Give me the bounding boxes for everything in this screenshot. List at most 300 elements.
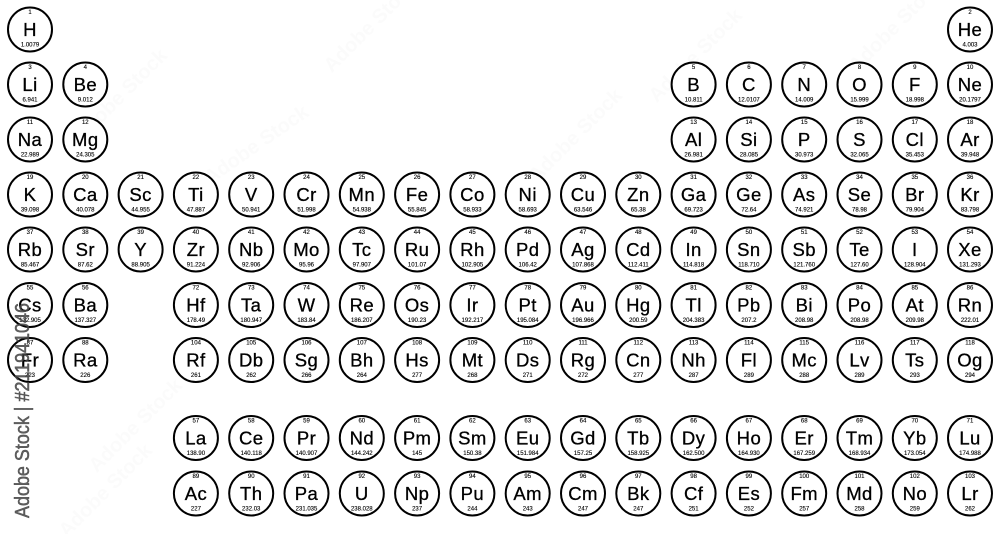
element: Tc: Tc bbox=[352, 239, 371, 260]
element: Tl: 204.383 bbox=[683, 318, 705, 324]
element: Mc: 288 bbox=[799, 373, 810, 379]
element: At: 209.98 bbox=[906, 318, 925, 324]
element: Fm bbox=[782, 472, 826, 516]
element: Tb bbox=[616, 416, 660, 460]
element: Eu: Eu bbox=[516, 428, 539, 448]
element: In: 114.818 bbox=[683, 262, 705, 268]
element: Y: Y bbox=[134, 239, 147, 260]
element: Hg bbox=[616, 283, 660, 327]
element: Lr bbox=[948, 472, 992, 516]
element: Md: 258 bbox=[854, 506, 865, 512]
element: Zr: Zr bbox=[187, 239, 205, 260]
element: Te bbox=[838, 228, 882, 272]
element: Mg: 12 bbox=[82, 120, 89, 126]
element: Xe: 131.293 bbox=[959, 262, 982, 268]
element: U: 92 bbox=[358, 474, 366, 480]
element: Cf: Cf bbox=[684, 483, 704, 504]
element: Zn: Zn bbox=[627, 184, 649, 205]
element: Cn: 112 bbox=[634, 340, 644, 346]
element: Sr: 87.62 bbox=[78, 262, 93, 268]
element: Pr: 59 bbox=[303, 418, 310, 424]
element: Fr: 87 bbox=[27, 340, 34, 346]
element: Si bbox=[727, 118, 771, 162]
element: Tl: Tl bbox=[685, 294, 702, 316]
element: Po: Po bbox=[848, 294, 871, 316]
element: Au: Au bbox=[571, 294, 595, 316]
element: H bbox=[8, 8, 52, 52]
element: Bk bbox=[616, 472, 660, 516]
element: O: 15.999 bbox=[850, 98, 869, 104]
element: Bi bbox=[782, 283, 826, 327]
element: Ds: 110 bbox=[523, 340, 533, 346]
element: Ho bbox=[727, 416, 771, 460]
element: Am: 243 bbox=[523, 506, 533, 512]
element: Rn: Rn bbox=[958, 294, 982, 316]
element: Mo bbox=[284, 228, 328, 272]
element: Tm: Tm bbox=[846, 428, 873, 448]
element: Te: Te bbox=[849, 239, 870, 260]
element: Cs: Cs bbox=[18, 294, 42, 316]
element: Hs: 277 bbox=[412, 373, 423, 379]
element: Pt bbox=[506, 283, 550, 327]
element: Cn: Cn bbox=[626, 350, 651, 370]
element: At bbox=[893, 283, 937, 327]
element: Db: 262 bbox=[246, 373, 257, 379]
element: C: 12.0107 bbox=[738, 98, 760, 104]
element: Ar: Ar bbox=[960, 129, 980, 150]
element: K bbox=[8, 172, 52, 216]
element: U: U bbox=[355, 483, 369, 504]
element: Ta bbox=[229, 283, 273, 327]
element: Ti: 22 bbox=[193, 175, 200, 181]
element: Cf: 251 bbox=[689, 506, 699, 512]
element: Li: Li bbox=[22, 74, 38, 95]
element: Cd bbox=[616, 228, 660, 272]
element: La: 57 bbox=[193, 418, 200, 424]
element: Kr bbox=[948, 172, 992, 216]
element: B bbox=[672, 62, 716, 106]
element: Br: 35 bbox=[911, 175, 919, 181]
element: P: P bbox=[798, 129, 811, 150]
element: Tc: 97.907 bbox=[353, 262, 372, 268]
element: Gd bbox=[561, 416, 605, 460]
element: Se: 78.98 bbox=[852, 208, 868, 214]
element: Pt: 78 bbox=[524, 286, 532, 292]
element: Cs: 132.905 bbox=[19, 318, 42, 324]
element: Mg bbox=[63, 118, 107, 162]
element: Cu: 63.546 bbox=[574, 208, 593, 214]
element: Eu: 151.984 bbox=[517, 451, 539, 457]
element: In: 49 bbox=[690, 230, 698, 236]
element: Ts bbox=[893, 338, 937, 382]
element: Mn: 54.938 bbox=[353, 208, 372, 214]
element: I bbox=[893, 228, 937, 272]
element: Hg: Hg bbox=[626, 294, 651, 316]
element: Hg: 80 bbox=[635, 286, 642, 292]
element: K: 39.098 bbox=[21, 208, 40, 214]
element: Mg: Mg bbox=[72, 129, 99, 150]
element: Ne: Ne bbox=[958, 74, 982, 95]
element: Rf: Rf bbox=[186, 350, 206, 370]
element: Cr: 24 bbox=[303, 175, 310, 181]
element: Ho: 67 bbox=[746, 418, 753, 424]
element: Mn: 25 bbox=[358, 175, 366, 181]
element: Sb: Sb bbox=[792, 239, 816, 260]
element: As: 74.921 bbox=[795, 208, 814, 214]
element: Cu: 29 bbox=[580, 175, 587, 181]
element: Rn: 86 bbox=[967, 286, 974, 292]
element: Ar bbox=[948, 118, 992, 162]
element: Es bbox=[727, 472, 771, 516]
vertical stock watermark: Adobe Stock | #211941046 bbox=[12, 303, 34, 518]
element: Sg: 106 bbox=[301, 340, 312, 346]
element: Pu bbox=[450, 472, 494, 516]
element: Pa: 231.035 bbox=[296, 506, 318, 512]
element: Cd: 112.411 bbox=[628, 262, 649, 268]
element: Zr: 40 bbox=[193, 230, 200, 236]
element: Ir bbox=[450, 283, 494, 327]
element: Db: 105 bbox=[246, 340, 257, 346]
faint diagonal background watermarks: Adobe Stock bbox=[85, 374, 187, 477]
element: Rf: 261 bbox=[191, 373, 202, 379]
element: W: 74 bbox=[303, 286, 310, 292]
element: Pb: 82 bbox=[746, 286, 753, 292]
element: Th: 90 bbox=[248, 474, 255, 480]
element: Ru: 44 bbox=[414, 230, 421, 236]
element: Pm bbox=[395, 416, 439, 460]
element: He: 2 bbox=[968, 10, 972, 16]
element: Th bbox=[229, 472, 273, 516]
element: Pu: 94 bbox=[469, 474, 476, 480]
element: Ac: 227 bbox=[191, 506, 202, 512]
element: Es: Es bbox=[738, 483, 760, 504]
faint diagonal background watermarks: Adobe Stock bbox=[645, 4, 747, 107]
element: He: He bbox=[958, 19, 982, 40]
element: Ce bbox=[229, 416, 273, 460]
element: Er: Er bbox=[795, 428, 814, 448]
element: Al: Al bbox=[685, 129, 702, 150]
element: Nb: 92.906 bbox=[242, 262, 261, 268]
element: Nb: 41 bbox=[248, 230, 255, 236]
element: Md: 101 bbox=[854, 474, 865, 480]
element: Db bbox=[229, 338, 273, 382]
element: Cm: 247 bbox=[578, 506, 589, 512]
element: Ra bbox=[63, 338, 107, 382]
element: Pm: 145 bbox=[412, 451, 423, 457]
element: Pt: 195.084 bbox=[517, 318, 539, 324]
element: Ru bbox=[395, 228, 439, 272]
element: Hf: 72 bbox=[193, 286, 200, 292]
element: Au: 79 bbox=[580, 286, 587, 292]
element: Am bbox=[506, 472, 550, 516]
element: Th: Th bbox=[240, 483, 262, 504]
element: Fl: Fl bbox=[741, 350, 757, 370]
element: Ce: Ce bbox=[239, 428, 263, 448]
element: C: 6 bbox=[747, 65, 751, 71]
element: Np: 237 bbox=[412, 506, 423, 512]
element: Ac bbox=[174, 472, 218, 516]
element: Si: Si bbox=[740, 129, 758, 150]
element: Xe: Xe bbox=[958, 239, 982, 260]
element: Sc: 44.955 bbox=[131, 208, 150, 214]
element: Ti: Ti bbox=[188, 184, 204, 205]
element: Cl: 35.453 bbox=[906, 152, 925, 158]
element: Pb bbox=[727, 283, 771, 327]
element: No: 259 bbox=[910, 506, 920, 512]
element: Hf: 178.49 bbox=[187, 318, 206, 324]
element: I: I bbox=[912, 239, 918, 260]
element: Re: Re bbox=[350, 294, 374, 316]
element: Pr bbox=[284, 416, 328, 460]
element: I: 53 bbox=[911, 230, 919, 236]
element: Br: Br bbox=[905, 184, 924, 205]
element: Sn: Sn bbox=[737, 239, 761, 260]
element: Cl bbox=[893, 118, 937, 162]
element: Ta: 73 bbox=[248, 286, 255, 292]
element: As: As bbox=[793, 184, 815, 205]
element: At: 85 bbox=[911, 286, 919, 292]
element: Mt: Mt bbox=[462, 350, 483, 370]
element: Bi: 83 bbox=[801, 286, 808, 292]
element: Cm: Cm bbox=[568, 483, 598, 504]
element: Og: Og bbox=[957, 350, 983, 370]
element: N bbox=[782, 62, 826, 106]
element: Nd: 144.242 bbox=[351, 451, 373, 457]
element: Xe bbox=[948, 228, 992, 272]
element: S: 32.065 bbox=[850, 152, 869, 158]
element: Es: 99 bbox=[746, 474, 753, 480]
element: H: 1.0079 bbox=[21, 42, 40, 48]
element: Ts: 117 bbox=[910, 340, 920, 346]
element: Pu: 244 bbox=[467, 506, 478, 512]
element: Lv: 116 bbox=[855, 340, 865, 346]
element: Ba: 56 bbox=[82, 286, 89, 292]
element: Sg bbox=[284, 338, 328, 382]
element: Bh bbox=[340, 338, 384, 382]
element: Si: 28.085 bbox=[740, 152, 759, 158]
element: Bh: 107 bbox=[357, 340, 367, 346]
element: Dy bbox=[672, 416, 716, 460]
element: K: K bbox=[24, 184, 37, 205]
element: Cl: Cl bbox=[906, 129, 924, 150]
element: P bbox=[782, 118, 826, 162]
element: Kr: 83.798 bbox=[961, 208, 980, 214]
element: V: 23 bbox=[248, 175, 255, 181]
element: Og bbox=[948, 338, 992, 382]
element: Cm bbox=[561, 472, 605, 516]
element: O: 8 bbox=[858, 65, 862, 71]
element: Ac: 89 bbox=[193, 474, 200, 480]
element: Bk: Bk bbox=[627, 483, 650, 504]
element: Yb bbox=[893, 416, 937, 460]
element: B: 10.811 bbox=[685, 98, 703, 104]
element: Dy: 66 bbox=[690, 418, 698, 424]
element: Sc bbox=[119, 172, 163, 216]
element: Sb: 51 bbox=[801, 230, 808, 236]
element: Tm: 168.934 bbox=[849, 451, 871, 457]
element: Ag: 47 bbox=[580, 230, 587, 236]
element: Ni bbox=[506, 172, 550, 216]
element: Yb: Yb bbox=[903, 428, 927, 448]
element: Au: 196.966 bbox=[572, 318, 594, 324]
element: F bbox=[893, 62, 937, 106]
element: Ds: Ds bbox=[516, 350, 539, 370]
element: Rg bbox=[561, 338, 605, 382]
element: Cu bbox=[561, 172, 605, 216]
element: No: No bbox=[903, 483, 927, 504]
element: Pd: Pd bbox=[516, 239, 539, 260]
element: Li bbox=[8, 62, 52, 106]
element: No bbox=[893, 472, 937, 516]
element: Co bbox=[450, 172, 494, 216]
element: Sn bbox=[727, 228, 771, 272]
element: Ir: Ir bbox=[466, 294, 478, 316]
element: Ce: 140.118 bbox=[241, 451, 262, 457]
element: Se: Se bbox=[848, 184, 871, 205]
element: Fm: Fm bbox=[790, 483, 818, 504]
element: Ir: 192.217 bbox=[462, 318, 484, 324]
element: Po: 208.98 bbox=[850, 318, 869, 324]
element: Cr: 51.998 bbox=[297, 208, 316, 214]
element: Er: 167.259 bbox=[793, 451, 816, 457]
element: Ra: Ra bbox=[73, 350, 98, 370]
element: F: 9 bbox=[913, 65, 917, 71]
element: N: N bbox=[797, 74, 811, 95]
element: Ru: 101.07 bbox=[408, 262, 427, 268]
element: Cs: 55 bbox=[27, 286, 34, 292]
element: Sm: Sm bbox=[458, 428, 487, 448]
element: Ni: 58.693 bbox=[519, 208, 538, 214]
element: Er: 68 bbox=[801, 418, 808, 424]
element: Ra: 88 bbox=[82, 340, 89, 346]
element: Ca: 40.078 bbox=[76, 208, 95, 214]
element: S bbox=[838, 118, 882, 162]
element: Zn bbox=[616, 172, 660, 216]
element: La: 138.90 bbox=[187, 451, 206, 457]
element: Ne: 10 bbox=[967, 65, 974, 71]
element: Kr: Kr bbox=[960, 184, 980, 205]
element: Co: 27 bbox=[469, 175, 476, 181]
element: Lr: Lr bbox=[961, 483, 979, 504]
element: Np: 93 bbox=[414, 474, 421, 480]
element: Nh: Nh bbox=[681, 350, 706, 370]
element: Ga: Ga bbox=[681, 184, 707, 205]
faint diagonal background watermarks: Adobe Stock bbox=[525, 84, 627, 187]
element: Tb: 65 bbox=[635, 418, 642, 424]
element: S: S bbox=[853, 129, 866, 150]
element: Cd: 48 bbox=[635, 230, 642, 236]
element: Y: 39 bbox=[137, 230, 145, 236]
element: Ts: Ts bbox=[905, 350, 924, 370]
element: Na: 11 bbox=[27, 120, 34, 126]
element: Ar: 18 bbox=[967, 120, 974, 126]
element: Sc: Sc bbox=[129, 184, 152, 205]
element: Ba: 137.327 bbox=[74, 318, 97, 324]
element: Fl: 289 bbox=[744, 373, 755, 379]
element: I: 128.904 bbox=[904, 262, 926, 268]
element: Fe bbox=[395, 172, 439, 216]
element: Zr bbox=[174, 228, 218, 272]
element: Fe: 55.845 bbox=[408, 208, 427, 214]
element: In bbox=[672, 228, 716, 272]
element: Cr: Cr bbox=[296, 184, 317, 205]
element: Md: Md bbox=[846, 483, 873, 504]
element: Ge: 72.64 bbox=[741, 208, 757, 214]
element: Se: 34 bbox=[856, 175, 863, 181]
element: Kr: 36 bbox=[967, 175, 974, 181]
element: Rg: 272 bbox=[578, 373, 589, 379]
element: At: At bbox=[906, 294, 924, 316]
element: W bbox=[284, 283, 328, 327]
element: Li: 6.941 bbox=[22, 98, 38, 104]
element: No: 102 bbox=[910, 474, 920, 480]
element: Si: 14 bbox=[746, 120, 753, 126]
element: Ti: 47.887 bbox=[187, 208, 206, 214]
element: Mg: 24.305 bbox=[76, 152, 95, 158]
element: Fr: Fr bbox=[21, 350, 39, 370]
element: Cl: 17 bbox=[911, 120, 919, 126]
element: Ni: Ni bbox=[519, 184, 537, 205]
element: Ga: 31 bbox=[690, 175, 698, 181]
element: Tb: 158.925 bbox=[627, 451, 650, 457]
element: Au bbox=[561, 283, 605, 327]
element: Ca bbox=[63, 172, 107, 216]
element: Bk: 97 bbox=[635, 474, 642, 480]
element: Sc: 21 bbox=[137, 175, 145, 181]
element: V bbox=[229, 172, 273, 216]
element: Ba: Ba bbox=[74, 294, 97, 316]
element: B: B bbox=[687, 74, 700, 95]
element: Ds: 271 bbox=[523, 373, 533, 379]
element: F: F bbox=[909, 74, 921, 95]
element: Md bbox=[838, 472, 882, 516]
element: Yb: 173.054 bbox=[904, 451, 926, 457]
element: W: W bbox=[298, 294, 316, 316]
element: Te: 127.60 bbox=[850, 262, 869, 268]
element: Dy: Dy bbox=[682, 428, 706, 448]
element: Pa bbox=[284, 472, 328, 516]
element: V: V bbox=[245, 184, 258, 205]
element: Ne bbox=[948, 62, 992, 106]
element: Lu: 174.988 bbox=[959, 451, 982, 457]
element: Ge: Ge bbox=[736, 184, 762, 205]
element: Tc bbox=[340, 228, 384, 272]
element: Cf: 98 bbox=[690, 474, 698, 480]
element: Rg: Rg bbox=[571, 350, 595, 370]
element: Gd: 64 bbox=[580, 418, 587, 424]
element: Ba bbox=[63, 283, 107, 327]
element: Rb: 37 bbox=[27, 230, 34, 236]
element: Re: 186.207 bbox=[351, 318, 373, 324]
element: Sm: 150.38 bbox=[463, 451, 482, 457]
element: Pt: Pt bbox=[519, 294, 537, 316]
element: Sb bbox=[782, 228, 826, 272]
element: Rf: 104 bbox=[191, 340, 202, 346]
element: Og: 118 bbox=[965, 340, 975, 346]
element: Bk: 247 bbox=[633, 506, 644, 512]
element: Mo: 42 bbox=[303, 230, 310, 236]
element: V: 50.941 bbox=[242, 208, 261, 214]
element: Pa: 91 bbox=[303, 474, 310, 480]
faint diagonal background watermarks: Adobe Stock bbox=[200, 101, 314, 189]
element: Ag: 107.868 bbox=[572, 262, 594, 268]
element: Cn: 277 bbox=[633, 373, 644, 379]
element: He bbox=[948, 8, 992, 52]
element: Th: 232.03 bbox=[242, 506, 261, 512]
element: Rb bbox=[8, 228, 52, 272]
element: Db: Db bbox=[239, 350, 263, 370]
element: Sg: Sg bbox=[295, 350, 318, 370]
